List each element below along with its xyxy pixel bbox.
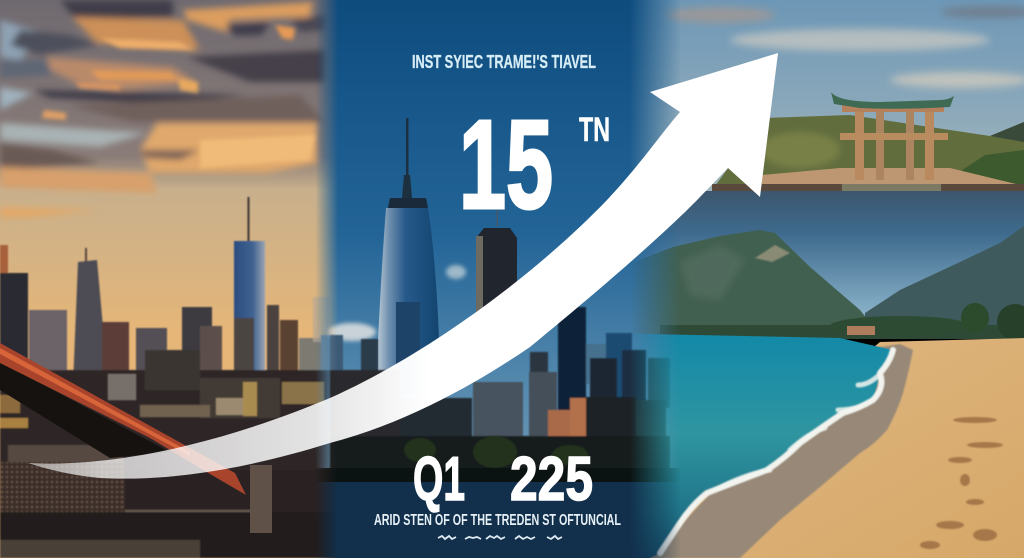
bridge [0,343,246,495]
torii hill [712,115,1024,192]
torii gate [831,92,954,196]
heading: INST SYIEC TRAME!'S TIAVEL [412,52,596,72]
centre skyline [330,307,670,480]
caption: ARID STEN OF OF THE TREDEN ST OFTUNCIAL [374,512,621,529]
small cloud [446,265,466,279]
treeline [660,303,1024,340]
squiggle line [438,536,562,539]
surf foam [660,350,893,553]
dark tower [476,210,517,312]
main blue tower [378,118,439,395]
panel: beach and torii [600,0,1024,558]
left skyline buildings [0,197,345,558]
panel: sunset city skyline [0,0,345,558]
arrow [28,53,778,479]
sand [640,338,1024,558]
mountain left [600,230,880,335]
harbour water [300,468,680,558]
wet sand [650,344,913,558]
mountain right [865,226,1024,335]
panel: blue city centre [300,0,680,558]
sand footprints [920,417,1003,549]
low cloud [328,323,376,341]
trees [404,436,588,468]
unit: TN [579,111,610,149]
sea [600,333,893,558]
clouds: sunset sky [0,0,325,218]
period label 225: 225 [510,445,593,514]
bridge pier [250,465,272,533]
clouds: right sky [665,6,1024,88]
big number: 15 [459,94,553,235]
period label Q1: Q1 [413,445,465,514]
